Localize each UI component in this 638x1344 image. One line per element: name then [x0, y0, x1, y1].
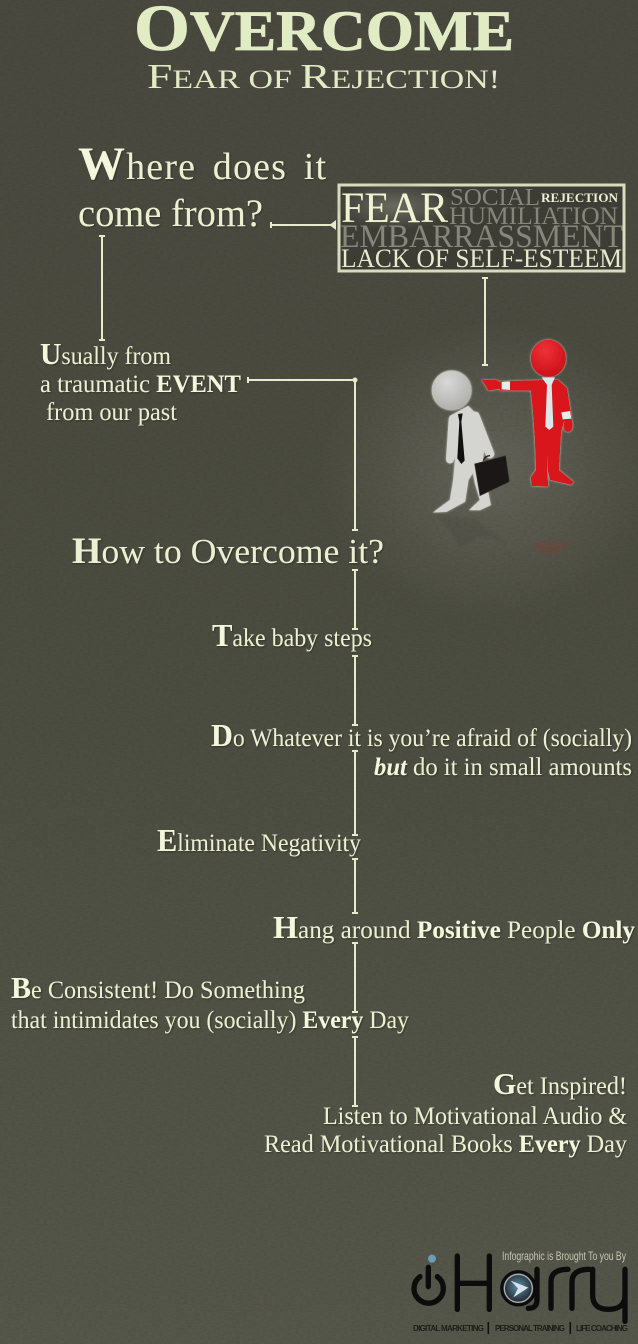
- logo services line: LIFE COACHING: [576, 1324, 628, 1333]
- text: usually from: a traumatic EVENT: [40, 371, 241, 398]
- step: hang around positive people: Hang around Positive People Only: [273, 909, 636, 945]
- step: be consistent: that intimidates you (socially) Every Day: [11, 1007, 409, 1034]
- step: get inspired: [264, 1066, 627, 1158]
- step: eliminate negativity: Eliminate Negativity: [157, 822, 361, 858]
- tie: [457, 413, 465, 464]
- step: get inspired: Get Inspired!: [493, 1066, 627, 1101]
- heading: how to overcome it: How to Overcome it?: [72, 531, 384, 572]
- word: humiliation: HUMILIATION: [449, 203, 618, 230]
- step: take baby steps: Take baby steps: [212, 617, 372, 653]
- timeline connectors: [352, 570, 358, 1106]
- figure: white man with briefcase: [432, 370, 491, 512]
- step: get inspired: Read Motivational Books Every Day: [264, 1131, 627, 1158]
- text: usually from: Usually from: [40, 336, 172, 371]
- logo services line: [413, 1322, 628, 1334]
- step: be consistent: Be Consistent! Do Something: [11, 970, 305, 1005]
- logo mark: [414, 1255, 625, 1321]
- word: lack of self-esteem: LACK OF SELF-ESTEEM: [341, 244, 622, 273]
- step: do whatever: but do it in small amounts: [374, 754, 632, 781]
- red man's shirt details: [502, 381, 510, 390]
- illustration: two figures: [432, 340, 573, 555]
- step: be consistent: [11, 970, 409, 1034]
- heading: where does it come from: Where does it: [78, 138, 326, 190]
- arrow: fear box to figures: [482, 278, 488, 365]
- logo services line: PERSONAL TRAINING: [495, 1324, 565, 1333]
- reflection: [435, 515, 573, 555]
- logo services line: DIGITAL MARKETING: [413, 1324, 484, 1333]
- word: social: SOCIAL: [450, 185, 540, 211]
- figure: red man pointing: [482, 340, 573, 487]
- panel: fear word cloud: [333, 182, 624, 273]
- subtitle: FEAR OF R EJECTION!: [147, 57, 500, 96]
- word: rejection: REJECTION: [541, 190, 619, 205]
- logo: iHarry: [413, 1249, 628, 1334]
- text: usually from: from our past: [46, 399, 177, 426]
- briefcase: [475, 456, 509, 496]
- text: usually from: [40, 336, 241, 426]
- arrow: question to fear box: [271, 222, 335, 228]
- heading: where does it come from: [78, 138, 326, 235]
- heading: where does it come from: come from?: [78, 192, 263, 235]
- arrow: event to timeline: [248, 377, 358, 530]
- step: get inspired: Listen to Motivational Audio &: [323, 1103, 627, 1130]
- word: embarrassment: EMBARRASSMENT: [340, 219, 623, 255]
- arrow: question to usually: [99, 236, 105, 340]
- step: do whatever: [211, 717, 632, 781]
- word: fear: FEAR: [341, 185, 448, 232]
